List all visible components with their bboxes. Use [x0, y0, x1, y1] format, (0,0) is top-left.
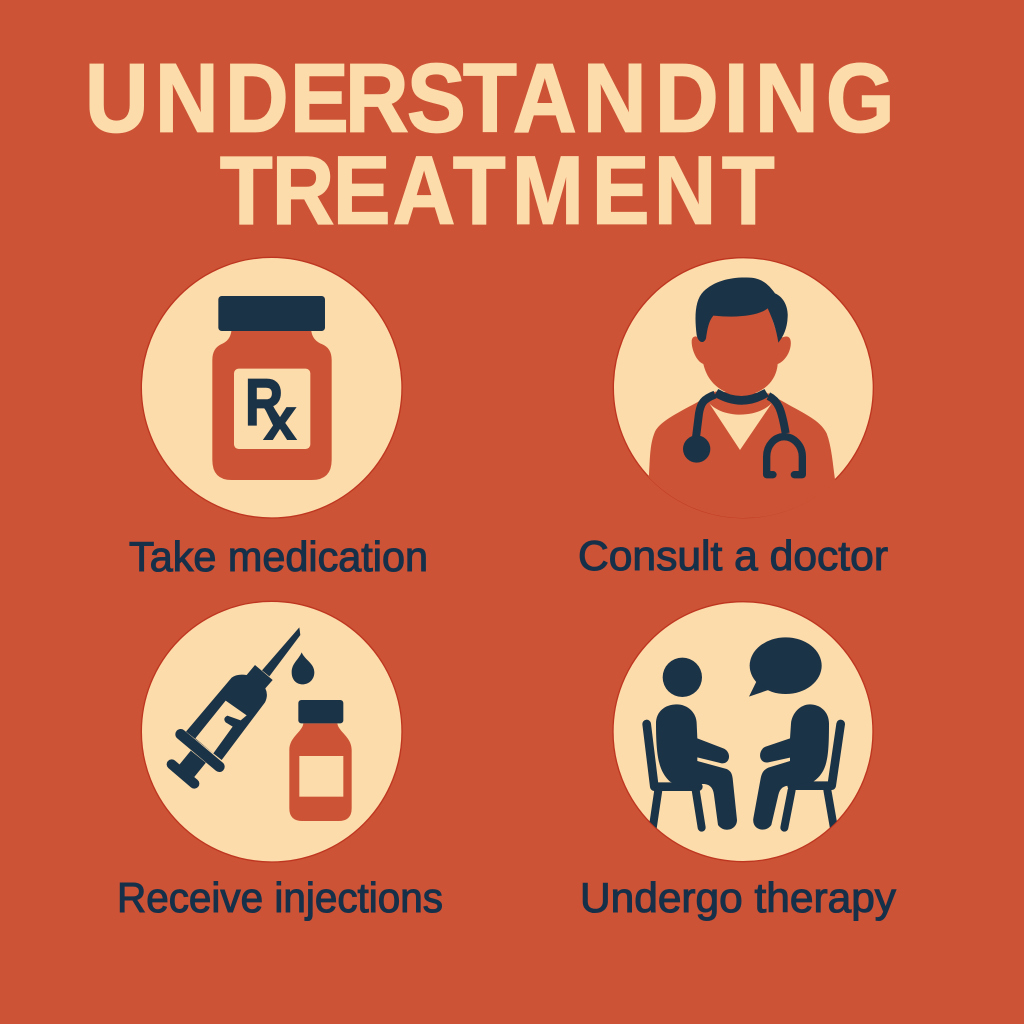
label: receive injections: Receive injections [117, 874, 443, 921]
icon: doctor with stethoscope [613, 258, 873, 518]
icon: medication bottle with Rx label: R [245, 365, 283, 439]
icon: syringe, drop and vial [141, 601, 402, 862]
label: take medication: Take medication [129, 533, 428, 580]
panel: receive injections [117, 601, 443, 921]
panel: take medication [129, 257, 428, 580]
title: TREATMENT [220, 137, 775, 245]
title [85, 43, 894, 245]
icon: two people talking in chairs [613, 602, 873, 862]
label: undergo therapy: Undergo therapy [580, 874, 896, 921]
panel: undergo therapy [580, 602, 896, 921]
icon: medication bottle with Rx label: x [263, 385, 297, 452]
panel: consult a doctor [578, 258, 888, 579]
label: consult a doctor: Consult a doctor [578, 532, 888, 579]
title: UNDERSTANDING [85, 43, 894, 153]
icon: medication bottle with Rx label [141, 257, 402, 518]
